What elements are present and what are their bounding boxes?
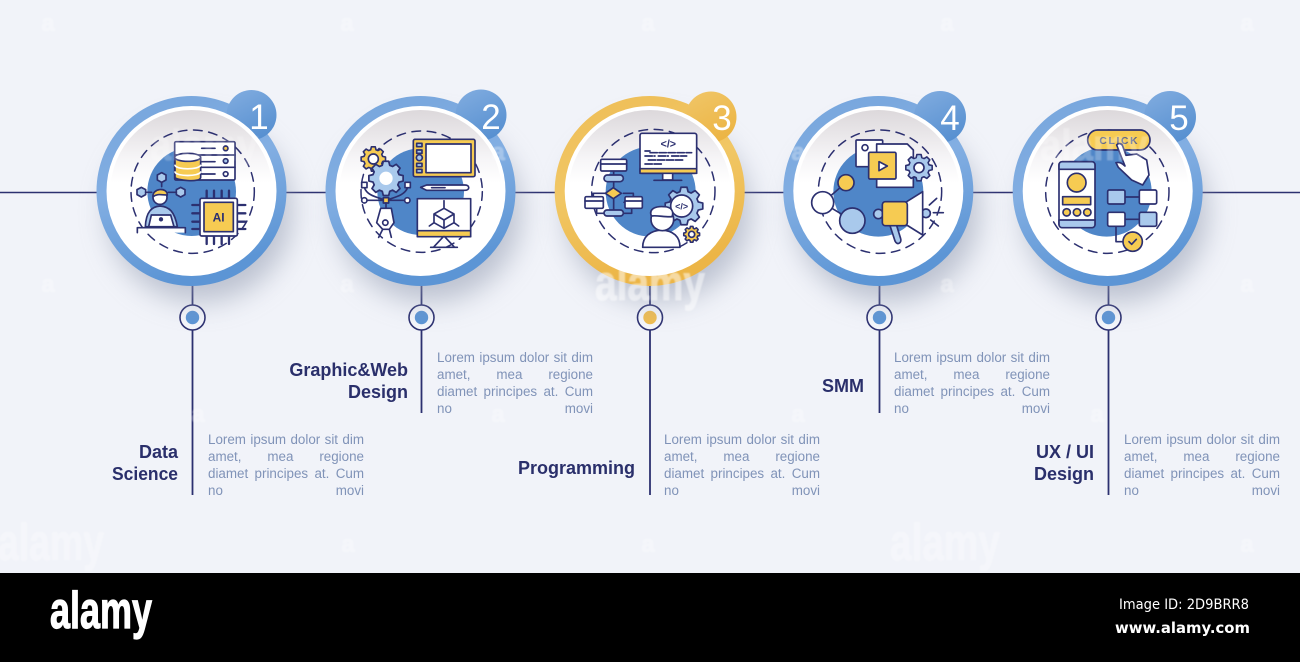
panel: step 5 circle, UX / UI Design bbox=[1013, 91, 1208, 302]
heading: UX / UI Design: Design bbox=[1034, 464, 1094, 484]
icon: data science: AI bbox=[213, 211, 225, 225]
watermarks: alamy bbox=[1040, 121, 1148, 170]
watermarks: a bbox=[641, 10, 655, 37]
heading: Data Science bbox=[112, 442, 179, 484]
heading: Graphic&Web Design bbox=[289, 360, 408, 402]
text block: step 1: no movi bbox=[208, 483, 364, 498]
text block: step 1: amet, mea regione bbox=[208, 449, 364, 464]
node marker 2 bbox=[409, 305, 434, 330]
text block: step 4: amet, mea regione bbox=[894, 367, 1050, 382]
text block: step 1: diamet principes at. Cum bbox=[208, 466, 364, 481]
heading: Graphic&Web Design: Design bbox=[348, 382, 408, 402]
text block: step 2: Lorem ipsum dolor sit dim bbox=[437, 350, 593, 364]
text block: step 3: no movi bbox=[664, 483, 820, 498]
footer band bbox=[0, 573, 1300, 662]
watermarks: alamy bbox=[890, 514, 1000, 572]
website: www.alamy.com bbox=[1115, 619, 1250, 637]
panel: step 3 circle, Programming (highlighted) bbox=[555, 92, 750, 302]
number badge 1: 1 bbox=[249, 98, 269, 137]
image id: Image ID: 2D9BRR8 bbox=[1119, 597, 1249, 613]
text block: step 2: diamet principes at. Cum bbox=[437, 384, 593, 399]
text block: step 3 bbox=[664, 432, 820, 498]
icon: data science bbox=[131, 130, 254, 253]
number badge 2: 2 bbox=[481, 98, 501, 137]
text block: step 2 bbox=[437, 350, 593, 416]
text block: step 2: no movi bbox=[437, 401, 593, 416]
panel: step 2 circle, Graphic and Web Design bbox=[326, 90, 521, 302]
text block: step 5 bbox=[1124, 432, 1280, 498]
number badge 3: 3 bbox=[712, 99, 732, 138]
heading: Graphic&Web Design: Graphic&Web bbox=[289, 360, 408, 380]
heading: UX / UI Design bbox=[1034, 442, 1094, 484]
text block: step 1: Lorem ipsum dolor sit dim bbox=[208, 432, 364, 446]
watermarks: alamy bbox=[595, 255, 705, 311]
node marker 4 bbox=[867, 305, 892, 330]
icon: design tools bbox=[361, 131, 482, 252]
watermarks: a bbox=[940, 10, 954, 37]
panel: step 1 circle, Data Science bbox=[96, 90, 292, 302]
watermarks: a bbox=[341, 531, 355, 558]
vertical connector 4 bbox=[878, 280, 880, 413]
watermarks: a bbox=[791, 139, 805, 166]
watermarks: a bbox=[1240, 10, 1254, 37]
icon: social media marketing bbox=[812, 130, 943, 253]
text block: step 1 bbox=[208, 432, 364, 498]
watermarks: a bbox=[41, 271, 55, 298]
icon: programming bbox=[585, 129, 715, 253]
text block: step 5: diamet principes at. Cum bbox=[1124, 466, 1280, 481]
text block: step 3: Lorem ipsum dolor sit dim bbox=[664, 432, 820, 446]
vertical connector 2 bbox=[420, 280, 422, 413]
watermarks: a bbox=[191, 401, 205, 428]
vertical connector 1 bbox=[192, 280, 194, 495]
text block: step 5: Lorem ipsum dolor sit dim bbox=[1124, 432, 1280, 446]
text block: step 5: no movi bbox=[1124, 483, 1280, 498]
watermarks: a bbox=[340, 271, 354, 298]
heading: SMM: SMM bbox=[822, 376, 864, 396]
heading: Data Science: Science bbox=[112, 464, 178, 484]
heading: Data Science: Data bbox=[139, 442, 179, 462]
timeline: horizontal line bbox=[0, 192, 1300, 194]
vertical connector 5 bbox=[1108, 280, 1110, 495]
icon: ux ui design: CLICK bbox=[1099, 136, 1139, 147]
watermarks: a bbox=[340, 10, 354, 37]
node marker 1 bbox=[180, 305, 205, 330]
text block: step 3: diamet principes at. Cum bbox=[664, 466, 820, 481]
heading: Programming: Programming bbox=[518, 458, 635, 478]
text block: step 2: amet, mea regione bbox=[437, 367, 593, 382]
panel: step 4 circle, SMM bbox=[783, 91, 979, 302]
watermarks: a bbox=[41, 10, 55, 37]
number badge 5: 5 bbox=[1169, 99, 1189, 138]
icon: programming: </> bbox=[661, 139, 676, 151]
icon: ux ui design bbox=[1046, 130, 1169, 253]
heading: UX / UI Design: UX / UI bbox=[1036, 442, 1094, 462]
watermarks: a bbox=[1240, 271, 1254, 298]
text block: step 4: Lorem ipsum dolor sit dim bbox=[894, 350, 1050, 364]
text block: step 3: amet, mea regione bbox=[664, 449, 820, 464]
watermarks: alamy bbox=[0, 514, 104, 572]
text block: step 4: no movi bbox=[894, 401, 1050, 416]
vertical connector 3 bbox=[649, 280, 651, 495]
watermarks: a bbox=[1090, 401, 1104, 428]
text block: step 5: amet, mea regione bbox=[1124, 449, 1280, 464]
text block: step 4 bbox=[894, 350, 1050, 416]
node marker 5 bbox=[1096, 305, 1121, 330]
watermarks: a bbox=[940, 271, 954, 298]
number badge 4: 4 bbox=[940, 99, 960, 138]
icon: programming: </> bbox=[675, 201, 688, 211]
watermarks: alamy bbox=[150, 121, 258, 170]
watermarks: a bbox=[491, 139, 505, 166]
text block: step 4: diamet principes at. Cum bbox=[894, 384, 1050, 399]
watermarks: a bbox=[791, 401, 805, 428]
watermarks: a bbox=[491, 401, 505, 428]
footer logo: alamy bbox=[50, 582, 152, 640]
node marker 3 bbox=[638, 305, 662, 330]
watermarks: a bbox=[1240, 531, 1254, 558]
watermarks: a bbox=[641, 531, 655, 558]
